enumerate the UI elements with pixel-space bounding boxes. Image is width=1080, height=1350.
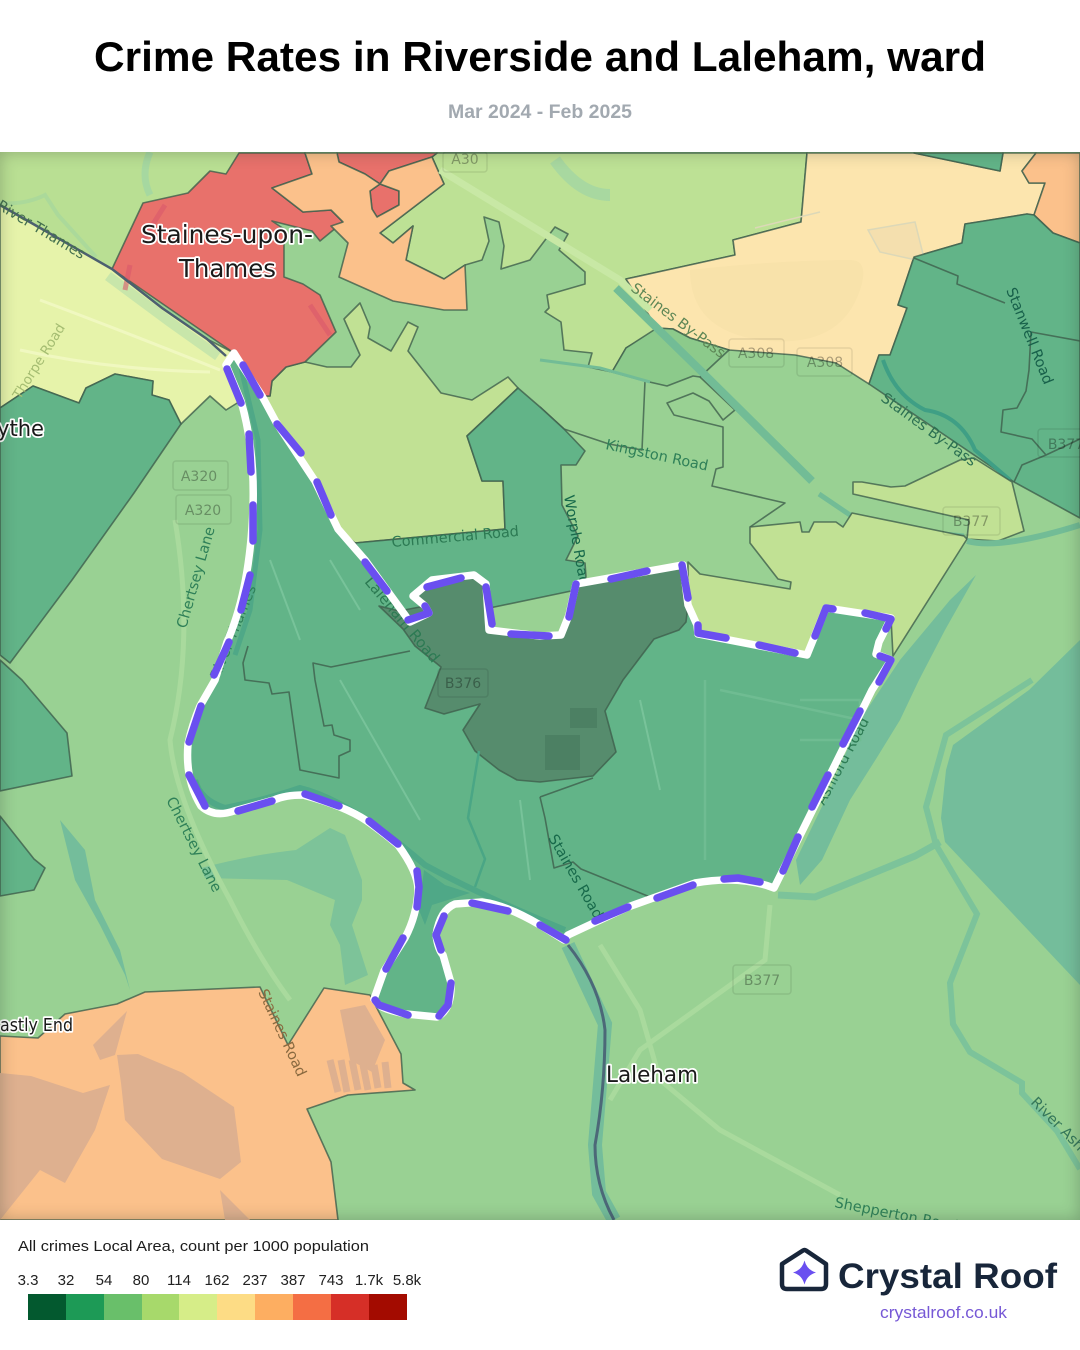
area: cream north east <box>626 153 1045 384</box>
area: Commercial Road mid green <box>355 388 586 622</box>
wordmark: Crystal Roof <box>838 1257 1057 1296</box>
legend scale: 387 <box>280 1272 306 1289</box>
legend <box>18 1238 422 1320</box>
road shields: B376 <box>445 676 481 692</box>
area: light green east of Kingston <box>688 458 1080 656</box>
area: Kingston Road wards <box>540 288 964 536</box>
legend scale <box>18 1272 422 1320</box>
area: west mid green <box>0 374 181 896</box>
ward boundary: dashed outline <box>188 353 891 1017</box>
road shields: A320 <box>181 469 217 485</box>
place labels: Laleham <box>606 1063 698 1088</box>
area: central light green <box>262 303 518 543</box>
area: water bodies <box>60 575 1080 990</box>
area: upper centre light green <box>380 153 807 372</box>
road labels: Commercial Road <box>391 524 520 551</box>
legend scale: 237 <box>242 1272 268 1289</box>
ward fill: Riverside and Laleham <box>188 353 891 1017</box>
road shields: A308 <box>807 355 843 371</box>
area: pale yellow riverside <box>0 205 242 424</box>
legend scale: 54 <box>96 1272 112 1289</box>
road labels: Ashford Road <box>813 715 873 808</box>
road shields: A30 <box>451 152 479 168</box>
road shields <box>173 152 1080 994</box>
legend scale: 80 <box>133 1272 149 1289</box>
legend scale: 114 <box>167 1272 191 1289</box>
area: north east corner <box>914 153 1080 243</box>
legend scale: 743 <box>318 1272 344 1289</box>
area: east mid green <box>869 214 1080 518</box>
road labels: Laleham Road <box>361 573 443 666</box>
legend scale: 5.8k <box>393 1272 422 1289</box>
area: upper left light green <box>0 152 239 269</box>
area: south west orange <box>0 987 415 1220</box>
road labels: Chertsey Lane <box>162 795 224 895</box>
road labels: Staines Road <box>545 832 606 922</box>
legend scale: 3.3 <box>18 1272 38 1289</box>
legend scale: 1.7k <box>355 1272 384 1289</box>
icon: house with star <box>782 1250 826 1289</box>
area: north orange <box>272 153 467 310</box>
road labels: Worple Road <box>560 494 592 587</box>
place labels: astly End <box>0 1016 73 1036</box>
legend heading: All crimes Local Area, count per 1000 population <box>18 1238 369 1255</box>
logo: Crystal Roof <box>780 1248 1058 1322</box>
road labels: Stanwell Road <box>1002 286 1056 387</box>
road labels <box>0 198 1080 1235</box>
map edge shading <box>0 152 1080 1220</box>
title: Crime Rates in Riverside and Laleham, ward <box>94 33 986 80</box>
legend scale: 162 <box>204 1272 230 1289</box>
road shields: B377 <box>953 514 989 530</box>
website url: crystalroof.co.uk <box>880 1304 1008 1322</box>
ward sub-boundaries <box>195 368 860 930</box>
choropleth map <box>0 152 1080 1220</box>
road shields: A308 <box>738 346 774 362</box>
place labels: Thames <box>178 254 276 283</box>
road labels: Kingston Road <box>604 437 709 475</box>
legend scale: 32 <box>58 1272 74 1289</box>
road labels: Staines Road <box>254 987 309 1079</box>
road shields: A320 <box>185 503 221 519</box>
place labels <box>0 220 698 1088</box>
river Thames line <box>0 205 614 1220</box>
road labels: River Thames <box>208 583 260 681</box>
road labels: Chertsey Lane <box>174 525 219 630</box>
place labels: Staines-upon- <box>141 220 313 249</box>
road shields: B377 <box>744 973 780 989</box>
road labels: Staines By-Pass <box>628 280 728 362</box>
area: darkest output areas in ward <box>379 565 688 782</box>
subtitle: date range: Mar 2024 - Feb 2025 <box>448 102 632 123</box>
road labels: Thorpe Road <box>9 321 69 403</box>
area: Staines red <box>112 153 437 396</box>
water channels and roads <box>170 170 1080 1195</box>
road labels: Staines By-Pass <box>878 390 979 470</box>
